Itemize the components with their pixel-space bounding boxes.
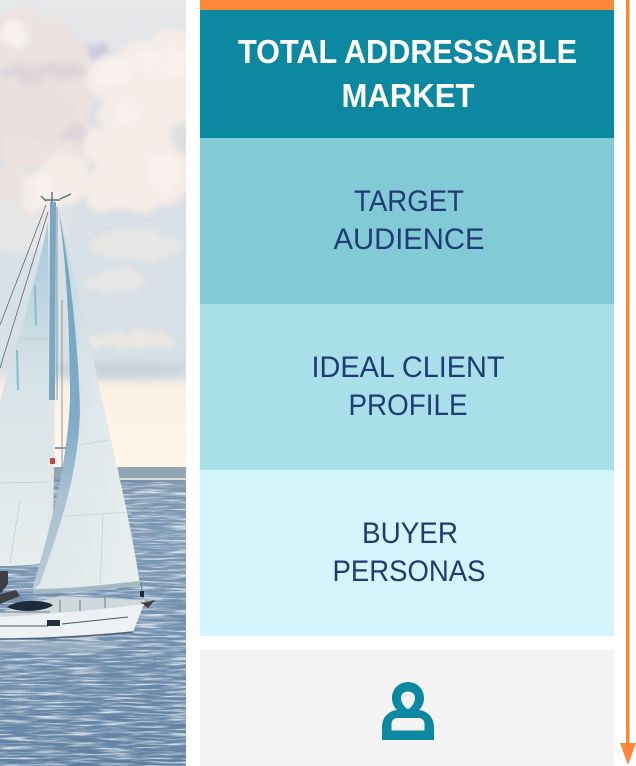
label: IDEAL CLIENT	[312, 351, 504, 384]
label	[334, 185, 484, 256]
heading: TOTAL ADDRESSABLE	[238, 33, 577, 70]
panel: buyer personas	[200, 470, 614, 636]
rigging	[0, 205, 48, 368]
sea	[0, 467, 186, 766]
icon: person	[382, 682, 434, 740]
heading: MARKET	[342, 77, 474, 114]
label: AUDIENCE	[334, 223, 484, 256]
clouds	[0, 9, 200, 378]
arrow: vertical orange arrow pointing down	[620, 0, 636, 765]
panel: person icon card	[200, 650, 614, 766]
label	[332, 517, 486, 588]
main sail	[0, 222, 50, 566]
label: PERSONAS	[332, 555, 486, 588]
panel: ideal client profile	[200, 304, 614, 470]
deck and cabin	[0, 596, 145, 620]
mast	[49, 202, 56, 400]
top accent bar	[200, 0, 614, 10]
sailboat	[0, 192, 155, 652]
label: BUYER	[362, 517, 458, 550]
jib blue leech band	[32, 212, 80, 590]
heading	[238, 33, 577, 114]
jib sail	[33, 212, 140, 594]
photo: sailboat on the sea at sunset	[0, 0, 186, 766]
label: TARGET	[354, 185, 464, 218]
panel: total addressable market	[200, 10, 614, 138]
label	[312, 351, 504, 422]
panel: target audience	[200, 138, 614, 304]
hull	[0, 604, 144, 639]
label: PROFILE	[348, 389, 468, 422]
sky	[0, 0, 186, 468]
